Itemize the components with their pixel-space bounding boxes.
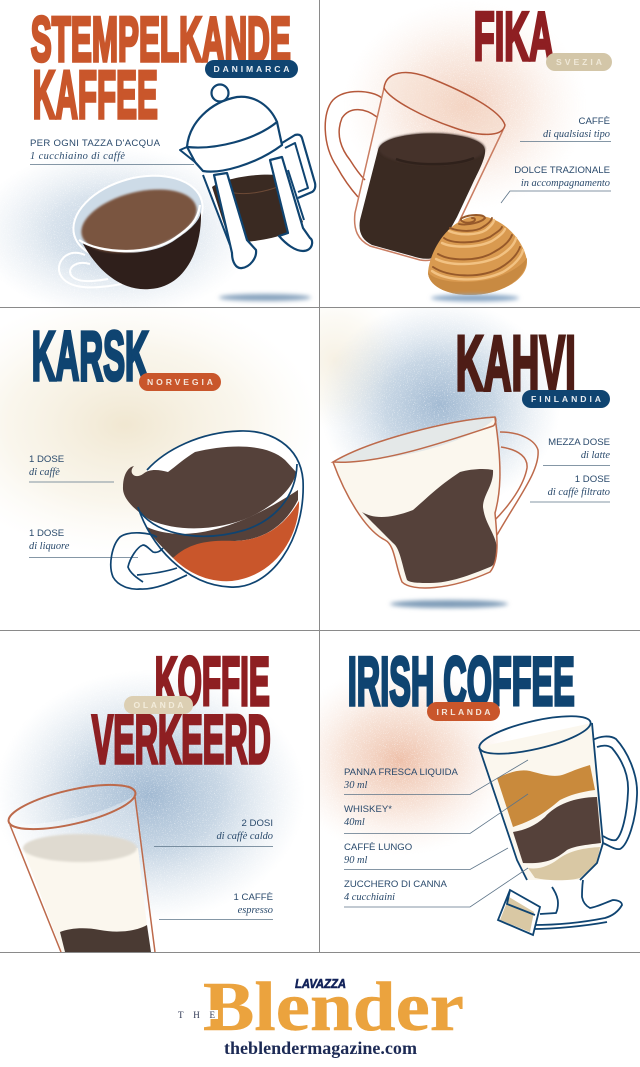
brand: Lavazza: LAVAZZA xyxy=(295,976,346,991)
badge: Irlanda: IRLANDA xyxy=(436,707,490,717)
ingredient label: caffè caldo xyxy=(154,818,273,846)
ingredient label: latte: MEZZA DOSE xyxy=(548,437,610,448)
ingredient label: caffè: di qualsiasi tipo xyxy=(543,129,610,140)
badge: Svezia xyxy=(546,53,612,71)
ingredient label: caffè: 1 DOSE xyxy=(29,454,64,465)
ingredient label: liquore xyxy=(29,528,138,558)
badge: Danimarca: DANIMARCA xyxy=(214,64,290,74)
ingredient label: caffè filtrato: 1 DOSE xyxy=(575,474,610,485)
ingredient label: zucchero: ZUCCHERO DI CANNA xyxy=(344,879,447,890)
ingredient label: dolce xyxy=(501,165,611,203)
ingredient label: panna: PANNA FRESCA LIQUIDA xyxy=(344,767,459,778)
shadow xyxy=(431,294,519,302)
badge: Irlanda xyxy=(427,702,500,721)
ingredient label: whiskey xyxy=(344,794,528,834)
icon: tall glass xyxy=(5,776,155,952)
heading: Stempelkande Kaffee xyxy=(31,5,291,133)
ingredient label: whiskey: 40ml xyxy=(344,817,365,828)
ingredient label: espresso: 1 CAFFÈ xyxy=(234,892,273,903)
ingredient label: acqua e caffè: 1 cucchiaino di caffè xyxy=(30,151,125,162)
badge: Svezia: SVEZIA xyxy=(556,57,602,67)
shadow xyxy=(219,294,311,301)
badge: Norvegia xyxy=(139,373,221,391)
heading: Koffie Verkeerd xyxy=(92,643,271,778)
ingredient label: zucchero xyxy=(344,868,528,907)
panel: Koffie Verkeerd, Olanda xyxy=(8,654,289,952)
panel: Irish Coffee, Irlanda xyxy=(320,654,638,936)
ingredient label: espresso: espresso xyxy=(238,905,273,916)
ingredient label: caffè lungo xyxy=(344,842,508,870)
ingredient label: caffè filtrato xyxy=(530,474,610,502)
ingredient label: caffè caldo: di caffè caldo xyxy=(216,831,273,842)
ingredient label: dolce: in accompagnamento xyxy=(521,178,610,189)
ingredient label: acqua e caffè: PER OGNI TAZZA D'ACQUA xyxy=(30,138,161,149)
ingredient label: whiskey: WHISKEY* xyxy=(344,804,392,815)
badge: Norvegia: NORVEGIA xyxy=(147,377,213,387)
icon: cinnamon bun xyxy=(428,215,527,295)
heading: Stempelkande Kaffee: KAFFEE xyxy=(33,57,158,133)
icon: cup xyxy=(111,431,303,589)
ingredient label: caffè xyxy=(29,454,114,482)
icon: french press xyxy=(180,84,315,268)
ingredient label: latte xyxy=(543,437,610,466)
ingredient label: caffè: CAFFÈ xyxy=(579,116,610,127)
ingredient label: latte: di latte xyxy=(581,450,610,461)
ingredient label: liquore: di liquore xyxy=(29,541,70,552)
ingredient label: zucchero: 4 cucchiaini xyxy=(344,892,395,903)
badge: Olanda xyxy=(124,696,193,714)
ingredient label: caffè lungo: CAFFÈ LUNGO xyxy=(344,842,412,853)
shadow xyxy=(390,600,508,608)
ingredient label: caffè caldo: 2 DOSI xyxy=(242,818,273,829)
icon: glass mug xyxy=(325,73,505,260)
panel: Stempelkande Kaffee, Danimarca xyxy=(0,0,319,317)
ingredient label: dolce: DOLCE TRAZIONALE xyxy=(514,165,610,176)
ingredient label: caffè lungo: 90 ml xyxy=(344,855,367,866)
wordmark: The Blender: Blender xyxy=(203,969,464,1046)
panel: Koffie Verkeerd, Olanda: VERKEERD xyxy=(92,701,271,778)
badge: Danimarca xyxy=(205,60,298,78)
ingredient label: caffè filtrato: di caffè filtrato xyxy=(548,487,610,498)
icon: irish coffee glass xyxy=(476,709,637,935)
wordmark: The Blender: THE xyxy=(178,1010,216,1020)
footer logo xyxy=(176,969,464,1058)
panel: Koffie Verkeerd, Olanda: KOFFIE xyxy=(155,643,270,720)
panel: Stempelkande Kaffee, Danimarca: STEMPELKANDE xyxy=(31,5,291,75)
ingredient label: panna xyxy=(343,760,528,794)
icon: cup xyxy=(333,417,538,588)
panel: Karsk, Norvegia xyxy=(0,323,304,590)
panel: Karsk, Norvegia: KARSK xyxy=(32,317,149,395)
ingredient label: espresso xyxy=(159,892,273,920)
ingredient label: panna: 30 ml xyxy=(343,780,367,791)
panel: Kahvi, Finlandia xyxy=(320,312,610,611)
panel: Fika, Svezia: FIKA xyxy=(474,0,554,75)
badge: Finlandia: FINLANDIA xyxy=(531,394,601,404)
panel: Fika, Svezia xyxy=(324,10,612,304)
ingredient label: acqua e caffè xyxy=(30,138,194,164)
badge: Finlandia xyxy=(522,390,610,408)
ingredient label: caffè: di caffè xyxy=(29,467,60,478)
badge: Olanda: OLANDA xyxy=(134,700,184,710)
icon: coffee cup xyxy=(59,162,212,289)
ingredient label: caffè xyxy=(520,116,611,142)
website url: theblendermagazine.com xyxy=(224,1038,417,1058)
ingredient label: liquore: 1 DOSE xyxy=(29,528,64,539)
